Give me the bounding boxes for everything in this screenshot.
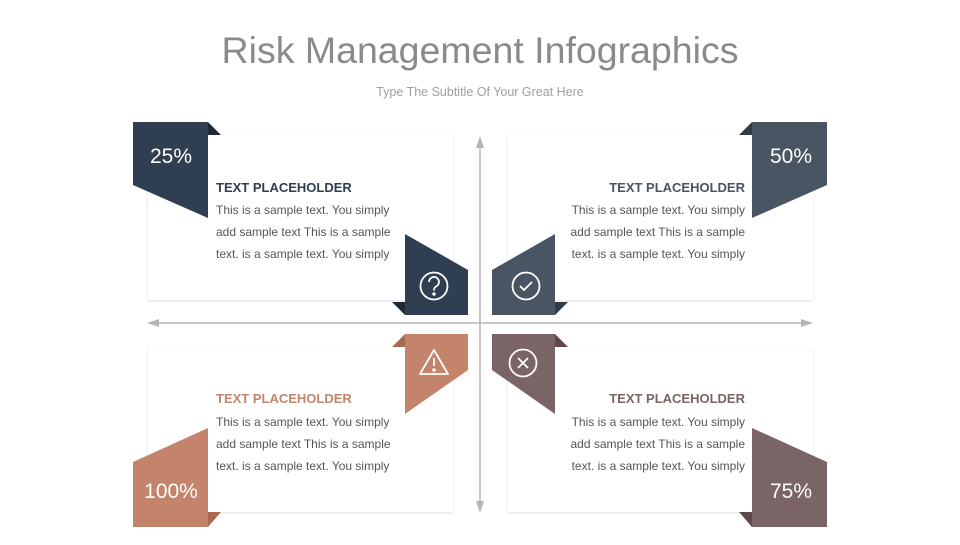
panel: top-left 25%: text. is a sample text. You simply <box>216 247 389 261</box>
panel: bottom-right 75%: 75% <box>770 480 812 503</box>
panel: top-left 25%: add sample text This is a sample <box>216 225 391 239</box>
panel: top-right 50%: text. is a sample text. You simply <box>572 247 745 261</box>
panel: top-left 25% <box>133 122 468 315</box>
panel: bottom-left 100% <box>133 334 468 527</box>
panel: top-right 50% <box>492 122 827 315</box>
title: Risk Management Infographics <box>222 29 738 71</box>
panel: bottom-left 100%: This is a sample text. You simply <box>216 415 389 429</box>
panel: bottom-right 75% <box>492 334 827 527</box>
panel: bottom-left 100%: TEXT PLACEHOLDER <box>216 391 352 406</box>
panel: bottom-left 100%: add sample text This is a sample <box>216 437 391 451</box>
panel: top-right 50%: TEXT PLACEHOLDER <box>609 180 746 195</box>
panel: bottom-left 100%: 100% <box>144 480 198 503</box>
icon: question <box>420 272 448 300</box>
icon: check <box>512 272 540 300</box>
panel: bottom-right 75%: text. is a sample text. You simply <box>572 459 745 473</box>
panel: bottom-right 75%: This is a sample text. You simply <box>572 415 745 429</box>
panel: bottom-right 75%: TEXT PLACEHOLDER <box>609 391 746 406</box>
subtitle: Type The Subtitle Of Your Great Here <box>376 85 584 99</box>
panel: top-left 25%: TEXT PLACEHOLDER <box>216 180 352 195</box>
panel: top-right 50%: 50% <box>770 145 812 168</box>
panel: top-right 50%: This is a sample text. You simply <box>572 203 745 217</box>
panel: top-left 25%: This is a sample text. You simply <box>216 203 389 217</box>
icon: cross <box>510 350 536 376</box>
icon: warning <box>420 350 448 374</box>
panel: bottom-left 100%: text. is a sample text. You simply <box>216 459 389 473</box>
panel: bottom-right 75%: add sample text This is a sample <box>570 437 745 451</box>
axes <box>147 136 813 513</box>
panel: top-left 25%: 25% <box>150 145 192 168</box>
panel: top-right 50%: add sample text This is a sample <box>570 225 745 239</box>
